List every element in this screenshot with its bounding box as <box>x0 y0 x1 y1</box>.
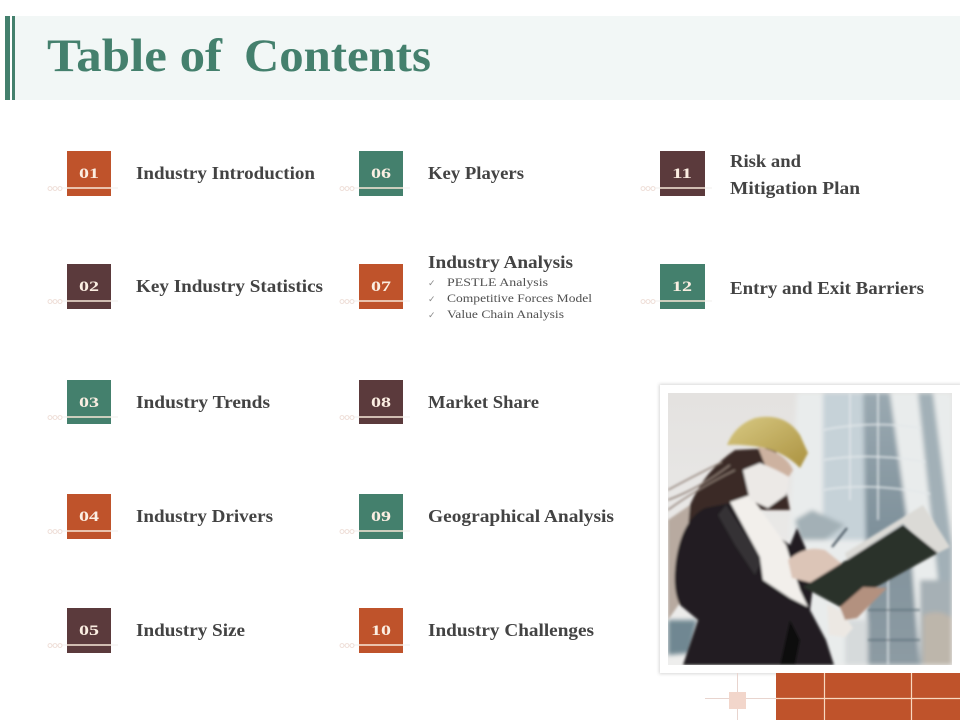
item 10: Industry Challenges <box>340 608 594 653</box>
hair <box>686 447 792 524</box>
item 06: Key Players: 06 <box>371 166 392 182</box>
item 01: Industry Introduction <box>48 151 315 196</box>
item 04: Industry Drivers: 04 <box>79 509 100 525</box>
item 03: Industry Trends <box>48 380 270 424</box>
item 10: Industry Challenges: Industry Challenges <box>428 620 594 640</box>
item 03: Industry Trends: 03 <box>79 395 99 411</box>
photo: woman with hard hat and face mask holding a folder <box>668 393 952 665</box>
item 07: Industry Analysis <box>340 252 592 321</box>
item 12: Entry and Exit Barriers <box>641 264 924 309</box>
item 09: Geographical Analysis: Geographical Analysis <box>428 506 614 526</box>
folder <box>803 525 938 607</box>
blazer <box>675 503 834 665</box>
title: Contents <box>244 30 431 82</box>
item 01: Industry Introduction: 01 <box>79 166 99 182</box>
item 12: Entry and Exit Barriers: 12 <box>672 279 692 295</box>
item 11: Risk and Mitigation Plan: 11 <box>672 166 692 182</box>
item 08: Market Share: Market Share <box>428 392 539 412</box>
item 07: Industry Analysis: ✓ <box>428 279 436 289</box>
item 11: Risk and Mitigation Plan: Risk and <box>730 151 801 171</box>
item 04: Industry Drivers <box>48 494 273 539</box>
item 07: Industry Analysis: ✓ <box>428 295 436 305</box>
item 11: Risk and Mitigation Plan: Mitigation Plan <box>730 178 860 198</box>
item 08: Market Share <box>340 380 539 424</box>
item 02: Key Industry Statistics: Key Industry Statistics <box>136 276 323 296</box>
item 08: Market Share: 08 <box>371 395 391 411</box>
item 10: Industry Challenges: 10 <box>371 623 391 639</box>
item 09: Geographical Analysis <box>340 494 614 539</box>
decorative orange grid block <box>776 673 960 720</box>
item 05: Industry Size <box>48 608 245 653</box>
title banner <box>5 16 960 100</box>
item 01: Industry Introduction: Industry Introduction <box>136 163 315 183</box>
item 07: Industry Analysis: ✓ <box>428 311 436 321</box>
item 07: Industry Analysis: Competitive Forces Model <box>447 293 592 305</box>
item 07: Industry Analysis: Industry Analysis <box>428 252 573 272</box>
item 07: Industry Analysis: 07 <box>371 279 392 295</box>
item 07: Industry Analysis: PESTLE Analysis <box>447 277 549 289</box>
item 06: Key Players: Key Players <box>428 163 524 183</box>
item 07: Industry Analysis: Value Chain Analysis <box>447 309 565 321</box>
item 11: Risk and Mitigation Plan <box>641 151 860 198</box>
item 04: Industry Drivers: Industry Drivers <box>136 506 273 526</box>
item 06: Key Players <box>340 151 524 196</box>
item 02: Key Industry Statistics <box>48 264 323 309</box>
title: Table of <box>47 30 223 82</box>
photo frame <box>659 384 960 674</box>
item 09: Geographical Analysis: 09 <box>371 509 391 525</box>
hard hat <box>727 417 808 468</box>
item 05: Industry Size: 05 <box>79 623 99 639</box>
item 02: Key Industry Statistics: 02 <box>79 279 99 295</box>
mask <box>743 463 789 508</box>
shirt <box>730 495 808 607</box>
item 12: Entry and Exit Barriers: Entry and Exit Barriers <box>730 278 924 298</box>
decorative pink square with crosshair <box>705 673 776 720</box>
lower hand <box>840 587 887 620</box>
item 05: Industry Size: Industry Size <box>136 620 245 640</box>
item 03: Industry Trends: Industry Trends <box>136 392 270 412</box>
hand with pen <box>788 549 847 583</box>
face <box>758 447 793 478</box>
